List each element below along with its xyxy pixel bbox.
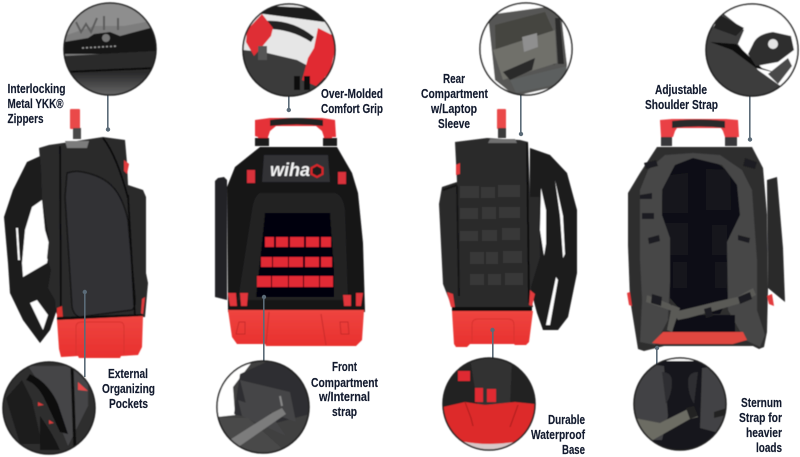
label: comfort grip (321, 87, 383, 116)
label: waterproof base: Waterproof (531, 428, 586, 442)
label: shoulder strap: Adjustable (655, 83, 707, 97)
label: sternum strap: heavier (746, 426, 782, 440)
label: front compartment: w/Internal (318, 390, 370, 404)
label: shoulder strap: Shoulder Strap (645, 98, 718, 112)
label: organizing pockets: Pockets (109, 397, 148, 411)
label: rear compartment: Sleeve (438, 117, 470, 131)
label: organizing pockets (102, 367, 155, 411)
detail circle: comfort grip (240, 0, 340, 100)
label: comfort grip: Comfort Grip (321, 102, 383, 116)
detail circle: waterproof base (440, 355, 540, 455)
backpack: rear side view (439, 109, 577, 347)
label: shoulder strap (645, 83, 718, 112)
callout line: waterproof base (490, 328, 495, 360)
callout line: rear compartment (519, 95, 523, 136)
label: zippers (8, 82, 66, 126)
label: sternum strap (739, 396, 782, 455)
detail circle: rear compartment (478, 0, 578, 100)
detail circle: front compartment (214, 358, 314, 457)
label: rear compartment: Rear (443, 72, 465, 86)
label: comfort grip: Over-Molded (321, 87, 383, 101)
label: organizing pockets: Organizing (102, 382, 155, 396)
label: waterproof base: Base (562, 443, 585, 457)
label: zippers: Interlocking (8, 82, 66, 96)
label: rear compartment: Compartment (421, 87, 489, 101)
backpack: front view: wiha (270, 160, 310, 180)
label: front compartment: Front (332, 360, 358, 374)
label: front compartment: strap (332, 405, 357, 419)
callout line: shoulder strap (748, 96, 752, 142)
label: rear compartment (421, 72, 489, 131)
label: sternum strap: loads (756, 441, 782, 455)
callout line: front compartment (262, 295, 266, 362)
callout line: organizing pockets (83, 290, 87, 377)
backpack: left side view (4, 109, 148, 358)
callout line: zippers (106, 95, 110, 132)
callout line: sternum strap (655, 346, 659, 366)
label: sternum strap: Strap for (739, 411, 782, 425)
label: front compartment (311, 360, 379, 419)
detail circle: shoulder strap (704, 2, 800, 98)
label: sternum strap: Sternum (741, 396, 782, 410)
label: organizing pockets: External (108, 367, 148, 381)
backpack: back view (627, 119, 785, 351)
label: zippers: Metal YKK® (8, 97, 64, 111)
detail circle: sternum strap (630, 355, 732, 455)
detail circle: zipper (60, 0, 160, 100)
label: waterproof base: Durable (548, 413, 585, 427)
detail circle: pockets (0, 360, 100, 457)
label: zippers: Zippers (8, 112, 44, 126)
callout line: comfort grip (287, 96, 291, 112)
backpack: front view (215, 118, 365, 346)
label: front compartment: Compartment (311, 376, 379, 390)
label: rear compartment: w/Laptop (430, 102, 477, 116)
label: waterproof base (531, 413, 586, 457)
